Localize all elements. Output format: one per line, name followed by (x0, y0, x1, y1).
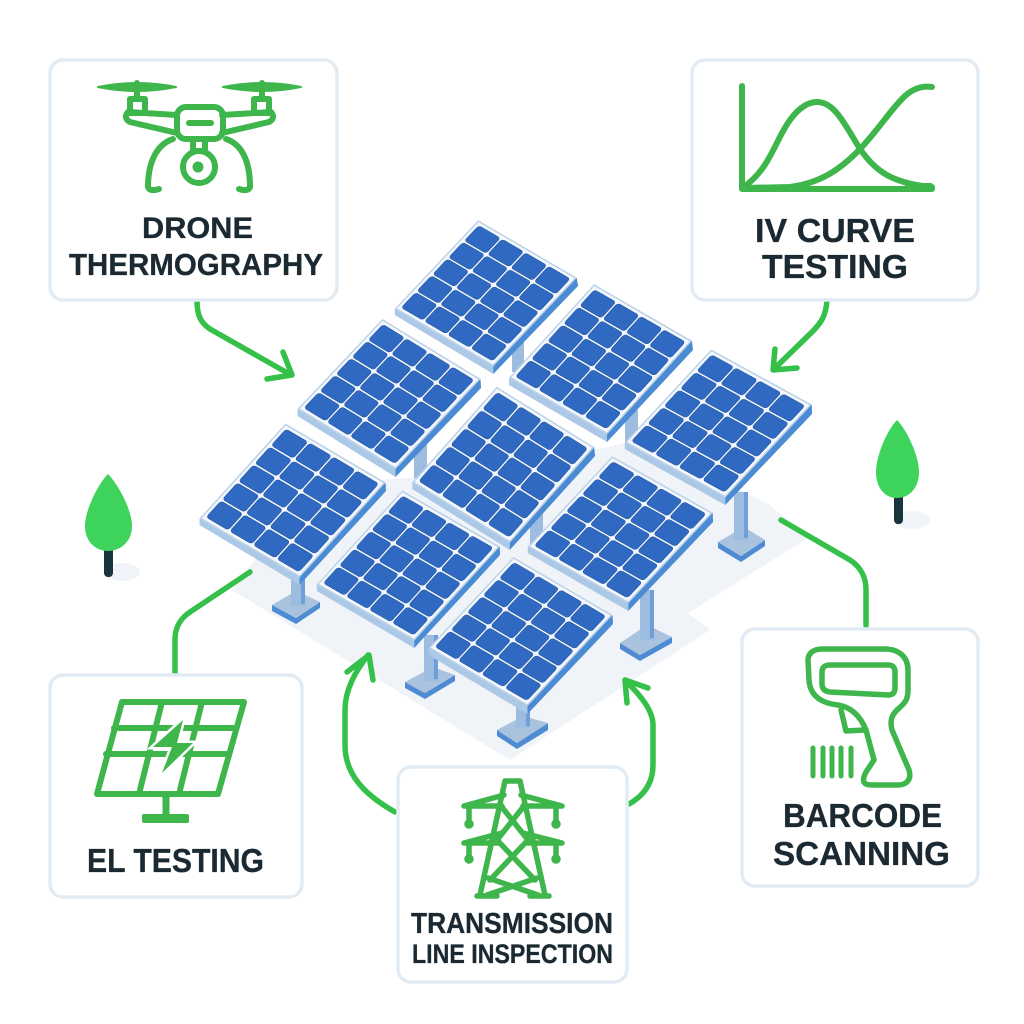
tree: right (876, 420, 930, 529)
label: drone thermography: THERMOGRAPHY (69, 247, 323, 282)
panel: drone thermography (50, 60, 337, 300)
label: transmission line inspection (411, 908, 613, 969)
mount: panel 6 base (620, 590, 672, 661)
solar panel 7 (200, 424, 386, 585)
solar array (200, 220, 812, 749)
label: transmission line inspection: LINE INSPECTION (412, 939, 613, 969)
panel: IV curve testing (692, 60, 978, 300)
solar panel 4 (298, 319, 481, 477)
solar panel 9 (428, 557, 613, 714)
mount: panel 7 base (272, 570, 320, 624)
solar panel 1 (395, 220, 578, 374)
label: IV curve testing (755, 212, 915, 285)
label: EL testing: EL TESTING (87, 842, 264, 879)
arrow: IV curve to array (773, 300, 827, 370)
arrow: transmission to array left (345, 655, 395, 812)
mount: panel 1 post (512, 340, 524, 372)
label: barcode scanning (773, 797, 950, 872)
label: drone thermography (69, 212, 323, 282)
tree: left (85, 474, 140, 581)
mount: panel 8 base (405, 635, 455, 699)
mount: panel 2 post (625, 410, 638, 445)
ground pad (232, 440, 808, 760)
label: transmission line inspection: TRANSMISSION (411, 908, 613, 940)
connector: EL testing to array (175, 572, 250, 676)
icon: solar panel with lightning bolt (97, 702, 244, 823)
icon: barcode scanner (808, 649, 910, 785)
panel: transmission line inspection (398, 767, 627, 982)
mount: panel 5 post (530, 510, 543, 550)
panel: barcode scanning (742, 629, 978, 886)
label: drone thermography: DRONE (142, 212, 253, 245)
icon: drone (98, 83, 301, 190)
solar panel 6 (528, 456, 713, 611)
mount: panel 4 post (414, 440, 427, 478)
icon: IV curve chart (742, 86, 932, 189)
label: IV curve testing: TESTING (762, 248, 908, 285)
solar panel 2 (509, 284, 693, 442)
icon: transmission tower (464, 781, 562, 896)
mount: panel 3 base (718, 492, 765, 562)
solar panel 8 (317, 490, 500, 648)
arrow: drone to array (197, 300, 292, 379)
solar panel 5 (412, 387, 595, 550)
label: barcode scanning: BARCODE (783, 797, 942, 834)
mount: panel 9 base (497, 700, 548, 749)
label: IV curve testing: IV CURVE (755, 212, 915, 249)
solar panel 3 (625, 350, 812, 505)
panel: EL testing (50, 675, 302, 897)
connector: barcode scanning to array (781, 520, 866, 626)
label: barcode scanning: SCANNING (773, 835, 950, 872)
arrow: transmission to array right (625, 680, 653, 804)
